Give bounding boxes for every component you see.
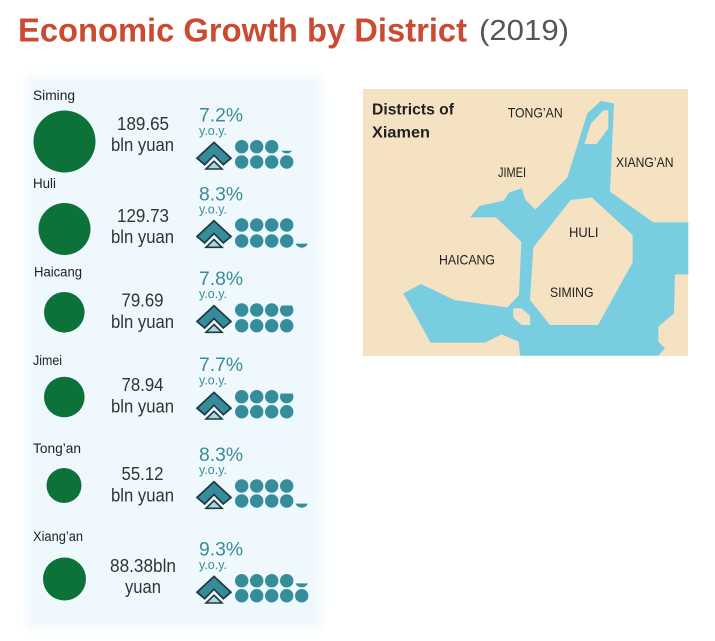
map heading: Districts of [372,102,455,118]
row: Tong'an: y.o.y. [199,462,227,477]
row: Huli: 129.73 [117,205,169,226]
row: Jimei: y.o.y. [199,372,227,388]
map: water [403,101,688,356]
map labels: SIMING [550,284,594,300]
row: Xiang'an: yuan [125,576,161,597]
row: Xiang'an: Xiang’an [33,529,83,544]
row: Tong'an: Tong’an [33,441,81,456]
row: Tong'an: 55.12 [122,463,164,484]
row: Siming: Siming [33,88,75,103]
row: Jimei: bln yuan [111,396,174,416]
row: Huli: y.o.y. [199,202,227,216]
map heading [372,102,455,142]
row: Tong'an [33,441,308,508]
row: Siming [33,88,293,172]
title: Economic Growth by District [18,12,467,50]
row: Siming: bln yuan [111,134,174,155]
row: Siming: 189.65 [117,113,169,134]
map labels: HULI [569,224,598,240]
row: Siming: 7.2% [199,104,243,126]
row: Huli [33,176,308,255]
row: Jimei [33,353,293,419]
map labels [439,104,674,300]
row: Xiang'an: 9.3% [199,538,243,560]
row: Haicang: 7.8% [199,268,243,290]
row: Jimei: Jimei [33,353,62,368]
map heading: Xiamen [372,124,430,142]
row: Tong'an: 8.3% [199,444,243,466]
row: Haicang: bln yuan [111,311,174,332]
row: Jimei: 7.7% [199,354,243,376]
row: Haicang: y.o.y. [199,286,227,301]
panel: map of Xiamen districts [363,89,688,356]
map labels: JIMEI [498,164,526,180]
row: Huli: bln yuan [111,226,174,247]
map labels: TONG’AN [508,104,563,120]
panel: district list [27,77,321,627]
row: Haicang: Haicang [34,264,82,280]
row: Huli: 8.3% [199,184,243,206]
row: Jimei: 78.94 [122,374,164,395]
row: Siming: y.o.y. [199,123,227,138]
row: Huli: Huli [33,176,56,191]
row: Xiang'an [33,529,308,603]
row: Haicang: 79.69 [122,290,164,310]
map labels: XIANG’AN [616,154,674,170]
row: Xiang'an: 88.38bln [110,555,176,576]
row: Tong'an: bln yuan [111,484,174,506]
row: Haicang [34,264,293,333]
map labels: HAICANG [439,252,495,268]
row: Xiang'an: y.o.y. [199,557,227,572]
title: (2019) [479,15,569,47]
